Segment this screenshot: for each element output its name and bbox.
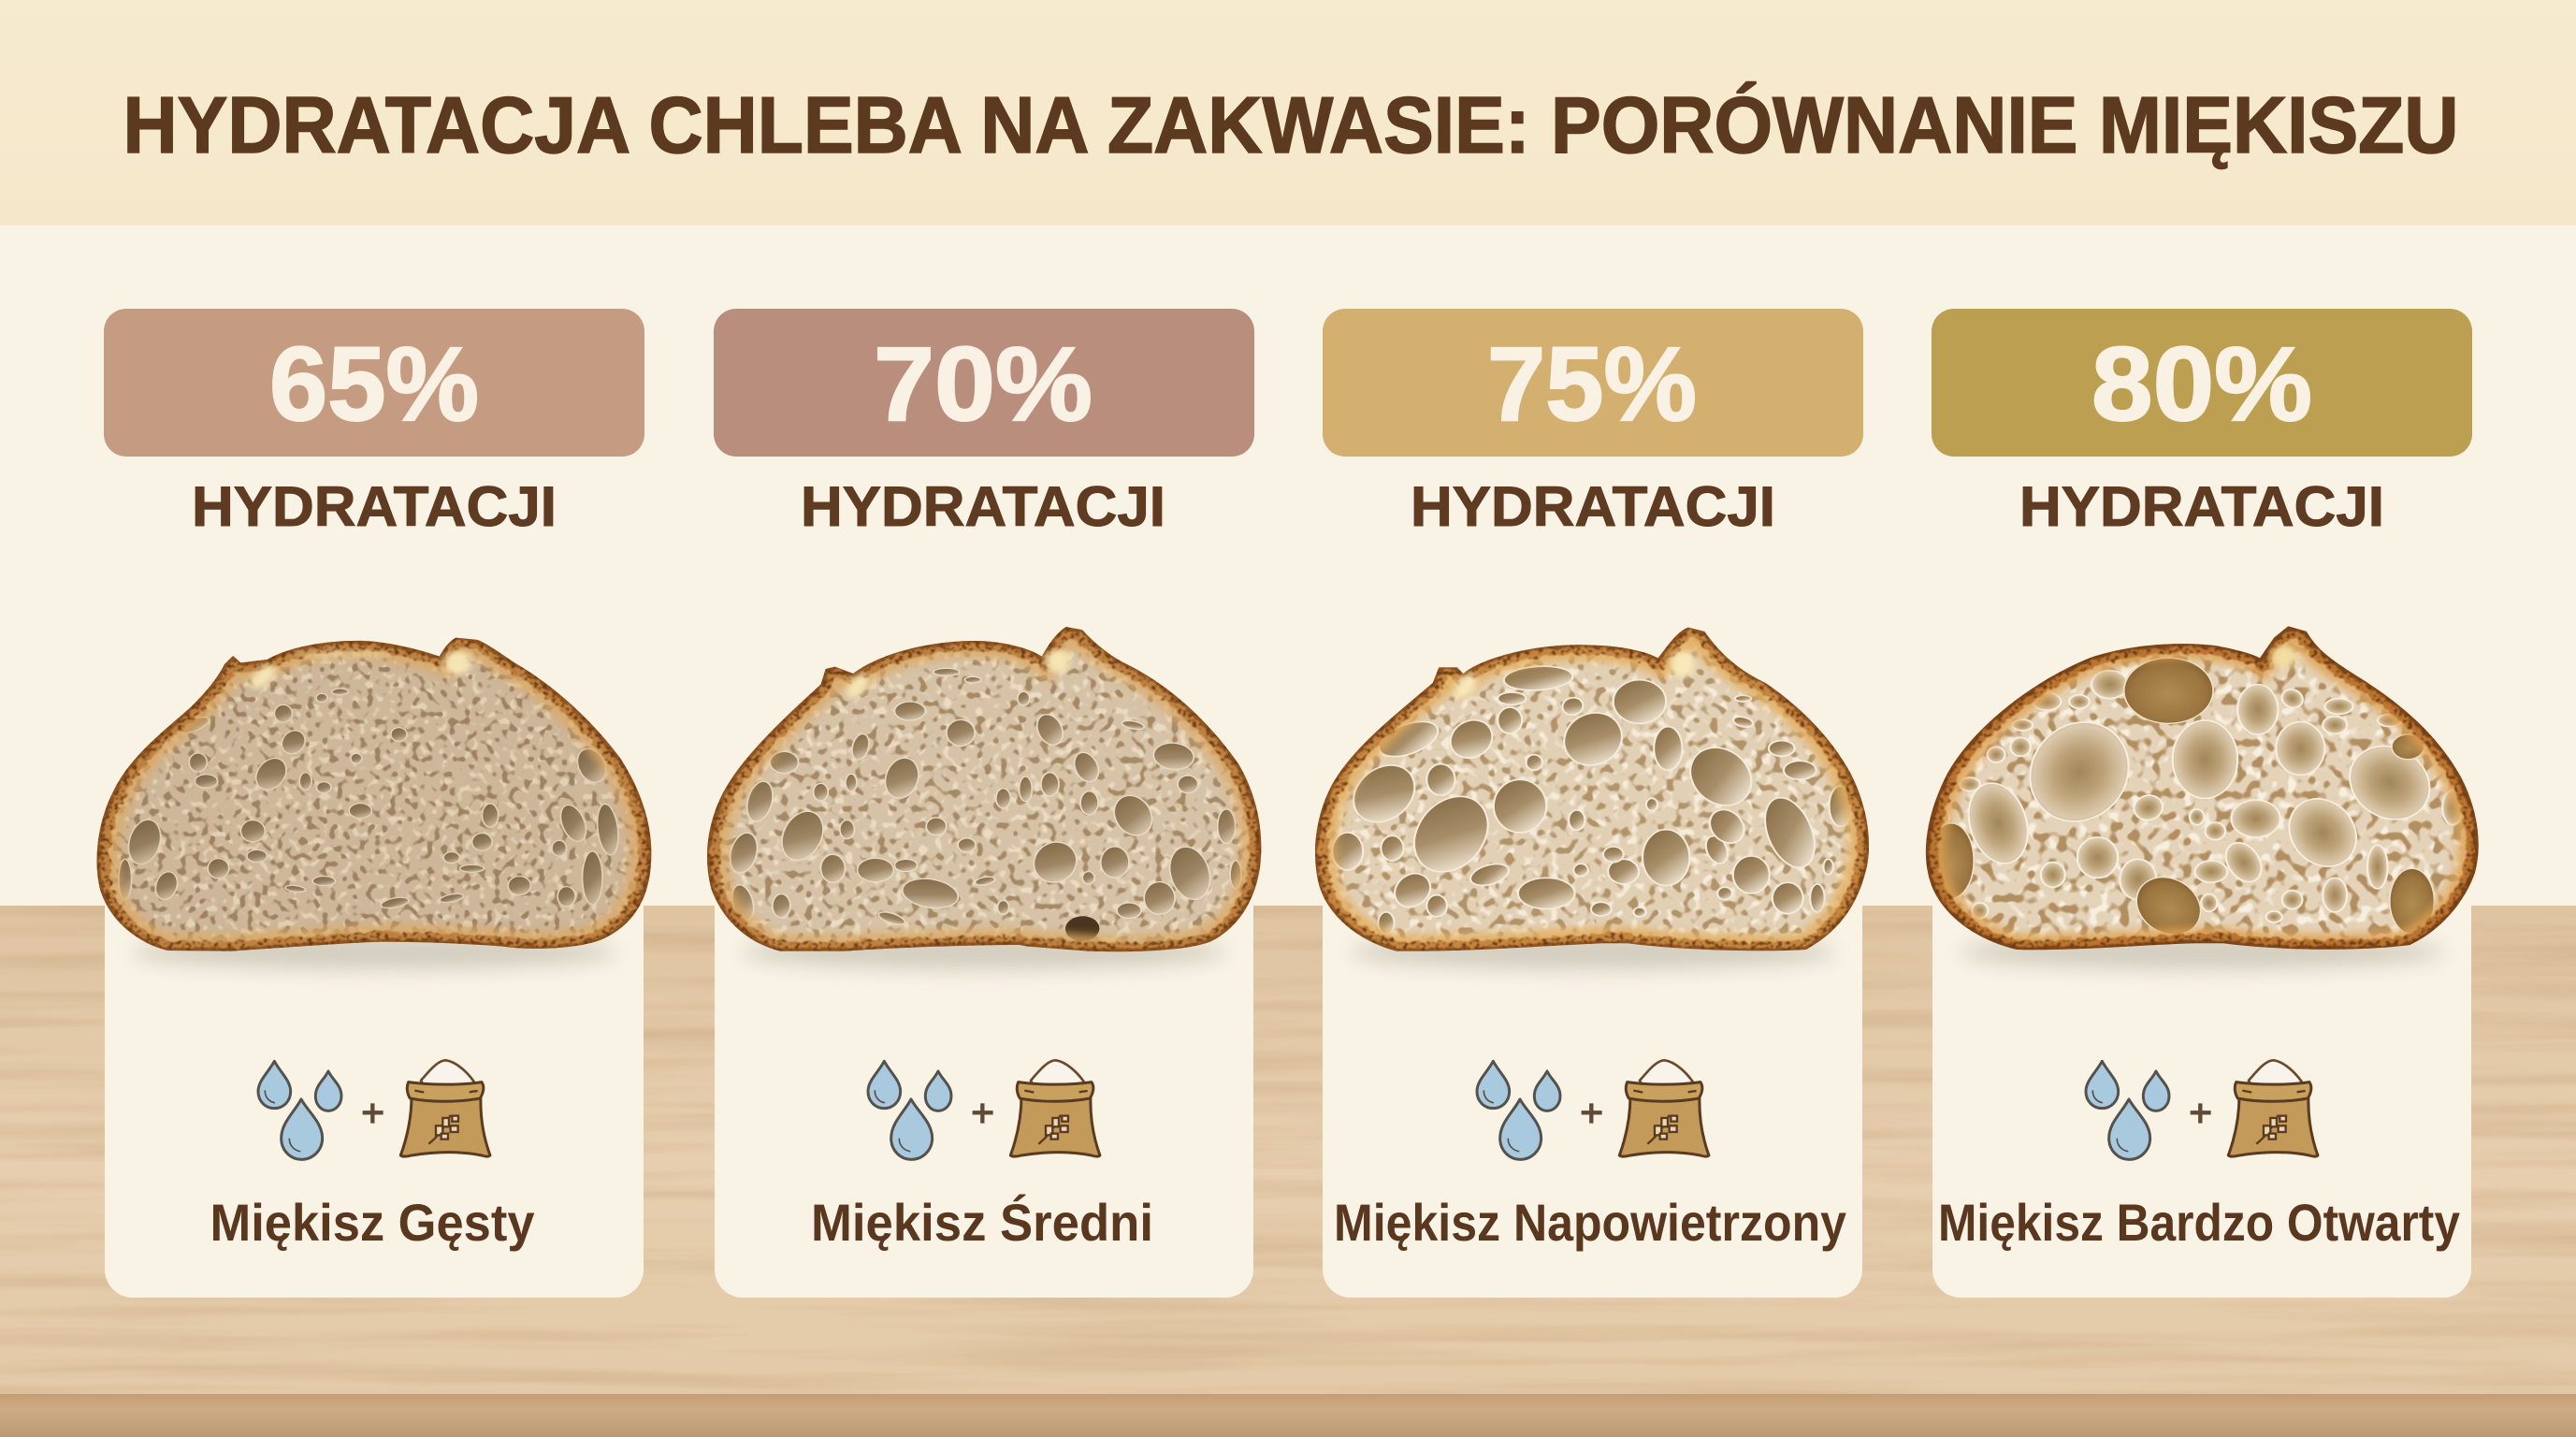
card — [1323, 842, 1862, 1298]
panel: 70% — [692, 309, 1272, 1298]
hydration label: HYDRATACJI — [801, 475, 1165, 538]
hydration badge 75% — [1323, 309, 1863, 457]
hydration badge 70%: 70% — [874, 326, 1093, 443]
hydration badge 80% — [1932, 309, 2472, 457]
card — [1932, 842, 2471, 1298]
loaf shadow — [131, 936, 617, 969]
card — [715, 842, 1253, 1298]
icon: water and flour — [1477, 1060, 1709, 1159]
icon: water and flour — [2086, 1060, 2318, 1159]
crumb label: Miękisz Bardzo Otwarty — [1938, 1193, 2460, 1252]
hydration badge 65%: 65% — [269, 326, 479, 443]
wooden table — [0, 906, 2576, 1437]
title: HYDRATACJA CHLEBA NA ZAKWASIE: PORÓWNANIE MIĘKISZU — [123, 81, 2458, 170]
panel: 80% — [1908, 309, 2488, 1298]
crumb label: Miękisz Średni — [811, 1193, 1153, 1252]
crumb label: Miękisz Napowietrzony — [1334, 1193, 1846, 1252]
hydration label: HYDRATACJI — [192, 475, 557, 538]
card — [105, 842, 644, 1298]
hydration badge 70% — [714, 309, 1254, 457]
panel: 65% — [84, 309, 664, 1298]
hydration label: HYDRATACJI — [1411, 475, 1775, 538]
bread crumb 75% — [1315, 627, 1869, 951]
loaf shadow — [1959, 936, 2445, 969]
panel: 75% — [1300, 309, 1880, 1298]
bread crumb 70% — [707, 627, 1261, 952]
loaf shadow — [741, 936, 1227, 969]
crumb label: Miękisz Gęsty — [210, 1193, 535, 1252]
title band — [0, 0, 2576, 225]
hydration label: HYDRATACJI — [2019, 475, 2384, 538]
bread crumb 65% — [97, 638, 651, 951]
icon: water and flour — [258, 1060, 490, 1159]
bread crumb 80% — [1925, 626, 2479, 951]
hydration badge 75%: 75% — [1487, 326, 1697, 443]
hydration badge 65% — [104, 309, 644, 457]
hydration badge 80%: 80% — [2091, 326, 2312, 443]
icon: water and flour — [868, 1060, 1100, 1159]
loaf shadow — [1350, 936, 1836, 969]
